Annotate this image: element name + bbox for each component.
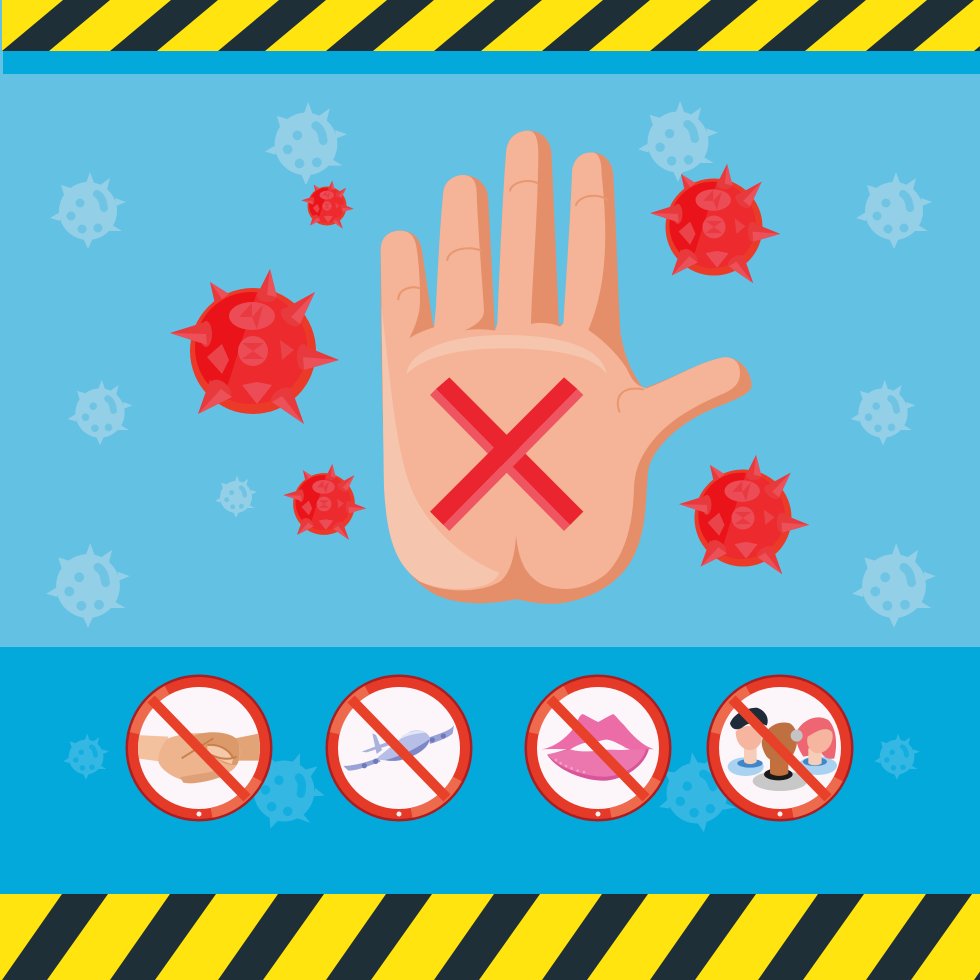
prohibition bar	[550, 699, 646, 798]
faint virus	[265, 102, 347, 185]
prohibition bar	[151, 699, 247, 798]
finger creases	[398, 181, 643, 412]
faint virus	[46, 543, 130, 628]
hand shadow silhouette	[381, 131, 752, 604]
sign: no handshake	[126, 674, 272, 822]
red virus top right	[650, 164, 780, 283]
prohibition bar	[351, 699, 447, 798]
icon: airplane	[343, 725, 454, 771]
faint virus	[851, 380, 915, 445]
sign: no kissing	[524, 674, 672, 822]
sign: no gatherings	[706, 674, 854, 822]
faint virus	[856, 172, 932, 249]
red virus large left	[170, 269, 339, 424]
faint viruses in lower band	[63, 734, 920, 842]
faint virus	[852, 543, 936, 628]
icon: handshake	[137, 732, 263, 783]
faint virus	[63, 734, 109, 780]
faint virus	[874, 734, 920, 780]
red X on palm	[430, 377, 583, 531]
faint virus	[68, 380, 132, 445]
faint virus background group	[46, 101, 936, 628]
faint virus	[50, 172, 126, 249]
hand main skin	[381, 131, 740, 590]
hand palm highlight left	[381, 307, 499, 589]
faint virus	[233, 739, 335, 842]
icon: lips	[542, 714, 654, 781]
red virus small top	[301, 181, 354, 229]
bottom caution stripes	[0, 894, 980, 980]
faint virus	[215, 476, 257, 518]
icon: group of people	[728, 708, 837, 791]
lower blue band	[0, 647, 980, 894]
red virus lower right	[679, 455, 809, 574]
sign: no air travel	[326, 674, 472, 822]
faint virus	[651, 746, 743, 839]
hand	[381, 131, 752, 604]
palm top arc highlight	[407, 335, 607, 374]
prohibition bar	[732, 699, 828, 798]
red virus small lower left	[283, 464, 366, 540]
faint virus	[638, 101, 718, 182]
top blue band	[3, 51, 980, 74]
top caution stripes	[2, 0, 980, 51]
